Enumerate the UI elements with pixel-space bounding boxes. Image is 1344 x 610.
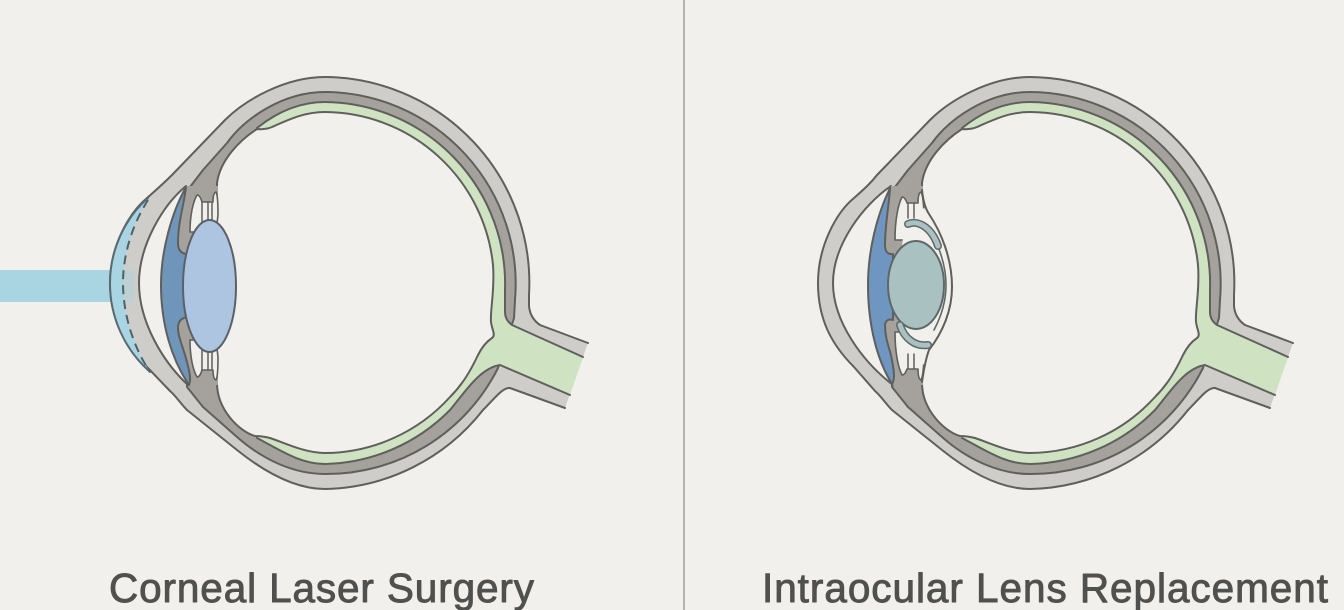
panel: corneal laser surgery bbox=[0, 77, 588, 610]
lens bbox=[183, 220, 236, 352]
corneal treated layer bbox=[110, 198, 150, 372]
dashed ablation line bbox=[123, 200, 150, 372]
intraocular lens optic bbox=[888, 241, 944, 329]
upper haptic bbox=[908, 223, 938, 246]
iris bbox=[868, 188, 894, 384]
label: corneal laser surgery: Corneal Laser Surgery bbox=[109, 565, 535, 610]
panel: intraocular lens replacement bbox=[762, 77, 1328, 610]
iris bbox=[161, 187, 190, 385]
label: intraocular lens replacement: Intraocular Lens Replacement bbox=[762, 565, 1328, 610]
lens capsule bbox=[897, 208, 952, 365]
lower haptic bbox=[900, 325, 928, 345]
eye diagram: lens replacement bbox=[818, 77, 1293, 489]
inner capsule line bbox=[934, 244, 946, 330]
eye diagram: laser surgery bbox=[110, 77, 588, 489]
laser beam bbox=[0, 270, 111, 302]
